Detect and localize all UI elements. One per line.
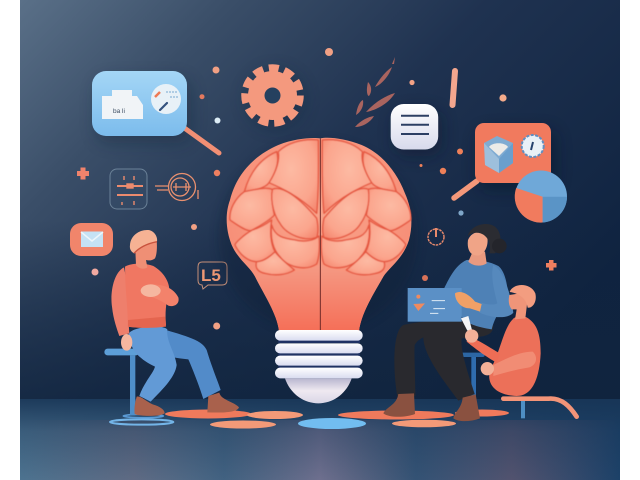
forearm (145, 284, 179, 306)
pie chart (515, 170, 567, 223)
person: woman with laptop (383, 224, 577, 421)
dial icon (151, 84, 181, 114)
document shape: ba li (113, 108, 125, 115)
background panel (20, 0, 620, 400)
trousers (394, 321, 493, 401)
icon: power symbol (428, 228, 444, 245)
icon: speech bubble with L5: L5 (201, 266, 221, 285)
front leg (129, 327, 177, 402)
child face (509, 293, 527, 319)
icon: circular line symbol (155, 174, 198, 200)
laptop (408, 288, 462, 322)
callout stem (183, 127, 219, 153)
bulb base rings (275, 330, 363, 378)
callout stem (454, 181, 477, 198)
head (468, 232, 488, 256)
sweater (125, 264, 169, 328)
person: man on stool (104, 230, 239, 425)
stool (455, 353, 485, 399)
head (135, 241, 157, 269)
cap brim (134, 242, 157, 253)
hair bun (492, 239, 507, 253)
floor discs (165, 410, 509, 429)
decorative dots right (409, 80, 507, 281)
icon: gear (245, 69, 305, 129)
child arm (493, 352, 536, 376)
icon: feather leaves (355, 57, 395, 127)
icon: plus right (546, 260, 556, 270)
child hands and pen (461, 316, 494, 375)
centre divide (319, 138, 322, 330)
hands (121, 284, 161, 351)
child cap (510, 285, 536, 308)
right hemisphere lobes (321, 140, 411, 275)
icon: plus left (77, 168, 89, 180)
decorative dots left (92, 48, 333, 330)
left hemisphere lobes (230, 140, 319, 275)
icon: mail badge (70, 223, 113, 256)
hand and wrist (455, 292, 482, 312)
floor (20, 399, 620, 480)
icon: menu card (391, 104, 442, 156)
child body (489, 316, 541, 396)
child seat (503, 399, 577, 418)
icon: stick (452, 71, 455, 105)
neck (468, 252, 487, 266)
card: blue chart callout (92, 71, 219, 153)
boots (383, 393, 480, 421)
stool (104, 349, 173, 425)
bulb dome (285, 378, 352, 403)
sweater (443, 260, 508, 329)
icon: sliders square (110, 169, 147, 209)
cap (130, 230, 157, 253)
cube (484, 136, 513, 173)
icon: speech bubble with L5 (198, 262, 227, 289)
arm back (111, 267, 129, 336)
dial (522, 135, 544, 157)
hair (468, 224, 501, 253)
card: orange cube callout (454, 123, 556, 198)
back leg (155, 327, 221, 399)
brain light bulb (218, 138, 418, 403)
arm (479, 265, 513, 317)
shoes (134, 393, 239, 416)
bulb neck and brain silhouette (227, 138, 411, 331)
